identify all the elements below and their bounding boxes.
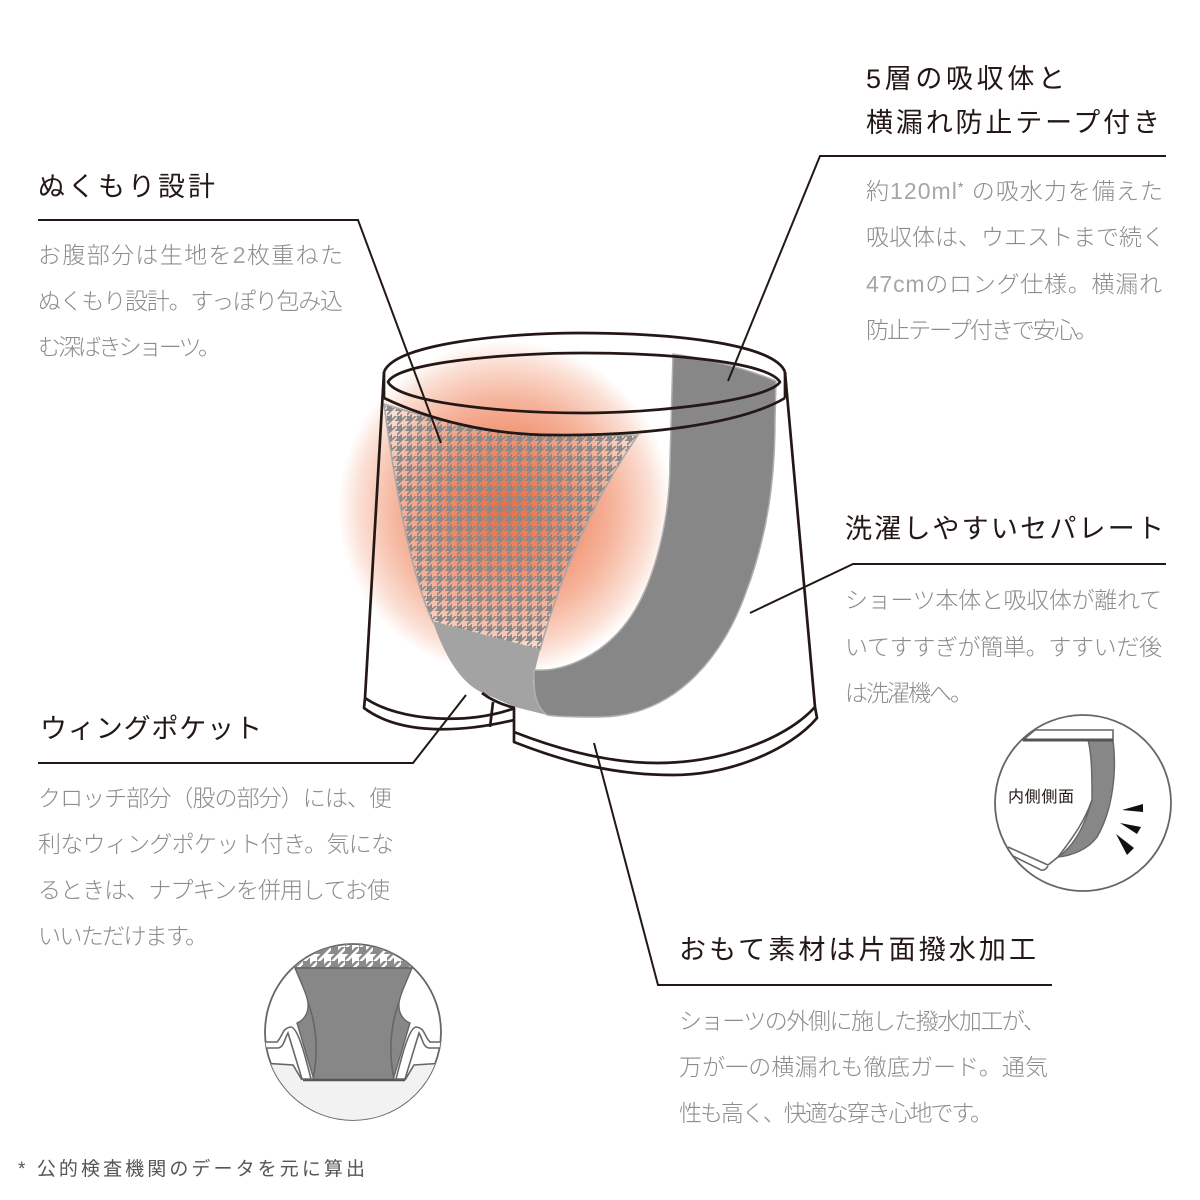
houndstooth front panel (384, 404, 638, 650)
shorts illustration (338, 333, 817, 775)
heading: 5層の吸収体と (866, 64, 1065, 94)
feature: wing pocket (38, 695, 466, 949)
description: む深ばきショーツ。 (38, 334, 221, 360)
description: るときは、ナプキンを併用してお使 (38, 877, 390, 903)
description: 吸収体は、ウエストまで続く (866, 224, 1165, 250)
feature: warmth (38, 172, 441, 443)
description: * (958, 179, 964, 195)
footnote: * 公的検査機関のデータを元に算出 (18, 1158, 365, 1180)
crotch panel (433, 622, 547, 715)
inset: wing pocket view (264, 943, 442, 1121)
description: 性も高く、快適な穿き心地です。 (679, 1100, 993, 1126)
description: ぬくもり設計。すっぽり包み込 (38, 288, 343, 314)
absorbent core (534, 354, 776, 717)
description: いいただけます。 (38, 923, 208, 949)
white waistband opening right side (573, 345, 785, 435)
heading: おもて素材は片面撥水加工 (679, 935, 1036, 965)
leader line (38, 220, 441, 443)
description: 約120ml (866, 178, 957, 204)
leader line (750, 564, 1166, 613)
description: は洗濯機へ。 (845, 680, 973, 706)
inset: inner side view (995, 715, 1171, 891)
leader line (38, 695, 466, 763)
heading: 洗濯しやすいセパレート (845, 514, 1164, 544)
description: 防止テープ付きで安心。 (866, 317, 1098, 343)
leader line (594, 743, 1052, 985)
feature: separate (750, 514, 1166, 706)
description: お腹部分は生地を2枚重ねた (38, 242, 343, 268)
heading: 横漏れ防止テープ付き (866, 108, 1160, 138)
warmth glow (338, 341, 672, 675)
heading (866, 64, 1160, 138)
feature: absorbent layers (728, 64, 1166, 381)
leader line (728, 156, 1166, 381)
description: の吸水力を備えた (964, 178, 1163, 204)
description (866, 178, 1165, 343)
waistband (384, 333, 785, 435)
description: クロッチ部分（股の部分）には、便 (38, 785, 392, 811)
body outline and leg cuffs (364, 372, 817, 775)
description: 利なウィングポケット付き。気にな (38, 831, 394, 857)
description (38, 785, 394, 949)
heading: ウィングポケット (40, 714, 262, 744)
motion marks (1116, 804, 1143, 855)
feature: water-repellent surface (594, 743, 1052, 1126)
heading: ぬくもり設計 (38, 172, 215, 202)
description: ショーツ本体と吸収体が離れて (845, 587, 1162, 613)
description: いてすすぎが簡単。すすいだ後 (845, 634, 1162, 660)
description: ショーツの外側に施した撥水加工が、 (679, 1008, 1046, 1034)
description (845, 587, 1162, 706)
inset label: 内側側面 (1008, 788, 1074, 806)
description (38, 242, 343, 360)
description: 万が一の横漏れも徹底ガード。通気 (679, 1054, 1048, 1080)
description: 47cmのロング仕様。横漏れ (866, 271, 1162, 297)
description (679, 1008, 1048, 1126)
